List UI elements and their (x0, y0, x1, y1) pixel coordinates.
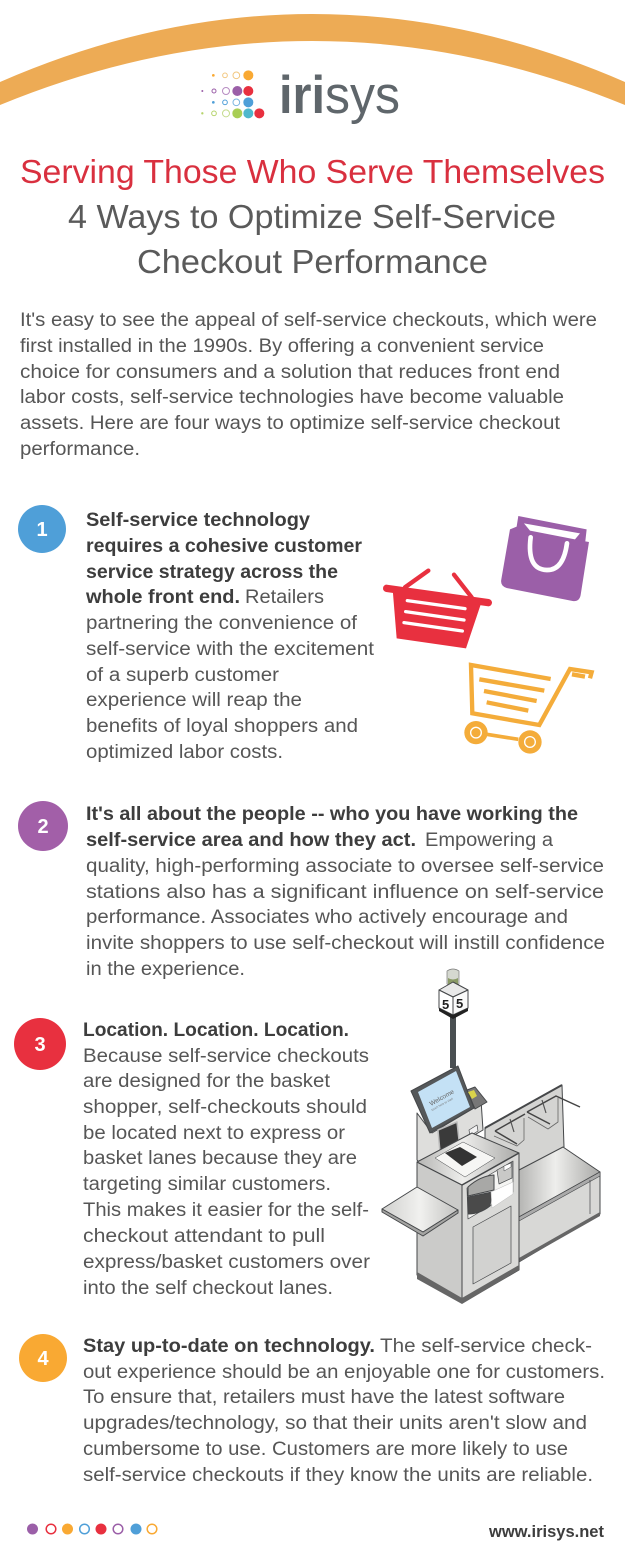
number badge 1 (18, 505, 66, 553)
section 1 text: experience will reap the (86, 690, 302, 711)
self-checkout machine illustration (382, 969, 600, 1304)
logo wordmark: sys (325, 66, 400, 125)
section 4 text: cumbersome to use. Customers are more likely to use (83, 1439, 568, 1460)
section 2 text (86, 804, 605, 980)
section 3 text: This makes it easier for the self- (83, 1200, 369, 1221)
section 4 text (83, 1336, 605, 1486)
cabinet door (473, 1206, 511, 1284)
scanner plate (435, 1142, 495, 1177)
intro paragraph: choice for consumers and a solution that reduces front end (20, 362, 560, 383)
section 2 text: invite shoppers to use self-checkout will instill confidence (86, 933, 605, 954)
footer website url: www.irisys.net (488, 1522, 604, 1541)
side shelf (382, 1187, 458, 1236)
section 1 text: Retailers (245, 587, 324, 608)
icon: shopping cart (464, 665, 592, 754)
section 2 text: Empowering a (425, 830, 553, 851)
intro paragraph: labor costs, self-service technologies have become valuable (20, 387, 564, 408)
back panel with bag racks (485, 1085, 580, 1172)
section 1 text: of a superb customer (86, 665, 280, 686)
section 1 text: benefits of loyal shoppers and (86, 716, 358, 737)
column behind screen (417, 1100, 483, 1163)
number badge 3 (14, 1018, 66, 1070)
title: Checkout Performance (137, 243, 488, 280)
icon: shopping bag (501, 516, 589, 601)
section 4 text: To ensure that, retailers must have the latest software (83, 1387, 565, 1408)
section 3 text: express/basket customers over (83, 1252, 371, 1273)
section 2 text: quality, high-performing associate to oversee self-service (86, 856, 604, 877)
logo dot grid (201, 70, 264, 118)
section 3 text: basket lanes because they are (83, 1148, 357, 1169)
logo wordmark: iri (279, 66, 325, 125)
section 3 text: into the self checkout lanes. (83, 1278, 333, 1299)
footer dots (27, 1524, 157, 1534)
number badge 4 (19, 1334, 67, 1382)
section 4 text: The self-service check- (380, 1336, 592, 1357)
number badge 1: 1 (36, 519, 48, 541)
touch screen: touch here to start (431, 1097, 454, 1112)
number badge 3: 3 (34, 1034, 46, 1056)
section 3 text: are designed for the basket (83, 1071, 331, 1092)
section 3 text: be located next to express or (83, 1123, 346, 1144)
touch screen (411, 1066, 474, 1133)
section 2 text: It's all about the people -- who you have working the (86, 804, 578, 825)
card reader (467, 1087, 487, 1136)
section 2 text: stations also has a significant influence on self-service (86, 882, 604, 903)
section 3 text (83, 1020, 371, 1299)
section 2 text: performance. Associates who actively encourage and (86, 907, 568, 928)
title: 4 Ways to Optimize Self-Service (68, 198, 556, 235)
section 1 text (85, 510, 375, 763)
right counter (519, 1147, 600, 1262)
intro paragraph (20, 310, 597, 460)
section 4 text: out experience should be an enjoyable one for customers. (83, 1362, 605, 1383)
section 4 text: self-service checkouts if they know the units are reliable. (83, 1465, 593, 1486)
number badge 4: 4 (37, 1348, 49, 1370)
section 1 text: whole front end. (85, 587, 240, 608)
section 3 text: Because self-service checkouts (83, 1046, 369, 1067)
section 3 text: checkout attendant to pull (83, 1226, 325, 1247)
section 1 text: requires a cohesive customer (86, 536, 363, 557)
section 2 text: self-service area and how they act. (86, 830, 416, 851)
top orange arc (0, 14, 625, 105)
title (20, 153, 605, 280)
section 3 text: Location. Location. Location. (83, 1020, 349, 1041)
section 3 text: targeting similar customers. (83, 1174, 331, 1195)
sign pole (450, 1016, 456, 1068)
section 2 text: in the experience. (86, 959, 245, 980)
section 1 text: optimized labor costs. (86, 742, 283, 763)
lane number sign: 5 (442, 997, 449, 1012)
receipt slot (438, 1122, 459, 1152)
section 4 text: upgrades/technology, so that their units aren't slow and (83, 1413, 587, 1434)
title: Serving Those Who Serve Themselves (20, 153, 605, 190)
icon: shopping basket (387, 571, 488, 648)
section 4 text: Stay up-to-date on technology. (83, 1336, 375, 1357)
section 3 text: shopper, self-checkouts should (83, 1097, 367, 1118)
bagging opening (467, 1161, 513, 1219)
irisys logo (201, 66, 400, 125)
lane number sign (439, 969, 468, 1019)
intro paragraph: It's easy to see the appeal of self-service checkouts, which were (20, 310, 597, 331)
number badge 2 (18, 801, 68, 851)
section 1 text: service strategy across the (86, 562, 338, 583)
intro paragraph: first installed in the 1990s. By offering a convenient service (20, 336, 544, 357)
section 1 text: self-service with the excitement (86, 639, 375, 660)
intro paragraph: assets. Here are four ways to optimize self-service checkout (20, 413, 561, 434)
main cabinet (417, 1133, 519, 1304)
intro paragraph: performance. (20, 439, 140, 460)
touch screen: Welcome (429, 1088, 456, 1108)
section 1 text: partnering the convenience of (86, 613, 358, 634)
section 1 text: Self-service technology (86, 510, 310, 531)
lane number sign: 5 (456, 996, 463, 1011)
number badge 2: 2 (37, 816, 49, 838)
